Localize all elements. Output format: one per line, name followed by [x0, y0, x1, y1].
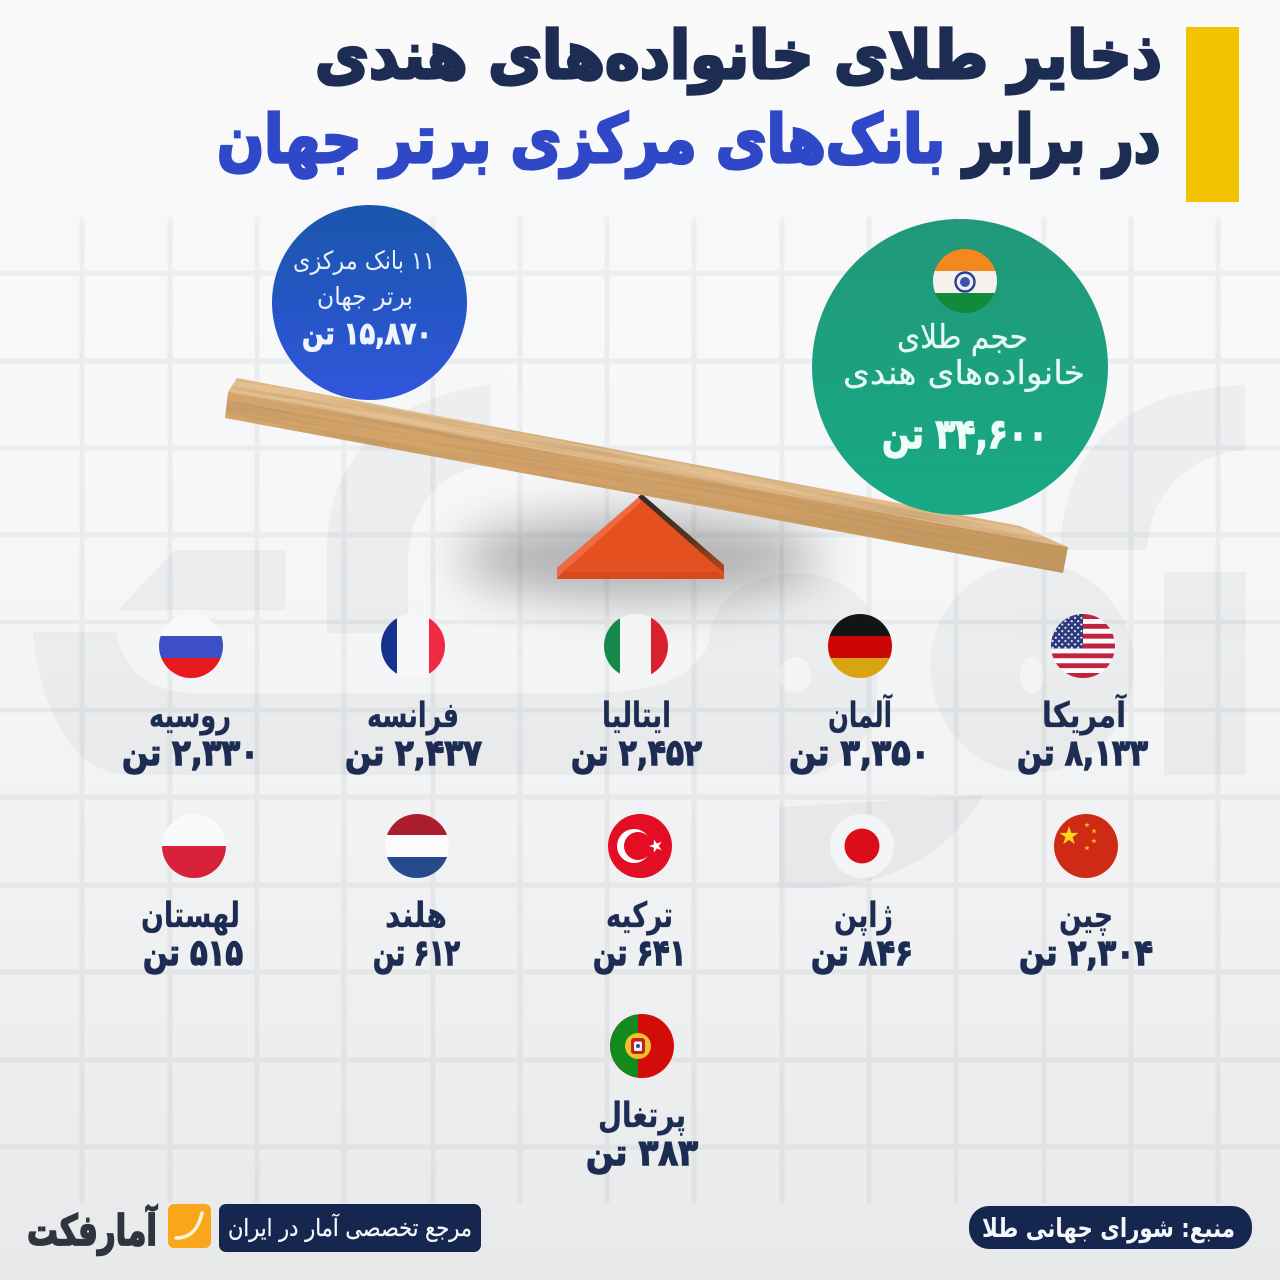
item: France: [345, 614, 482, 774]
icon: Japan flag: [830, 814, 894, 878]
icon: China flag: [1054, 814, 1118, 878]
title line 2 blue: بانک‌های مرکزی برتر جهان: [217, 101, 945, 179]
item: Italy: [571, 614, 702, 774]
fulcrum triangle: [557, 494, 724, 579]
item: Portugal: پرتغال: [598, 1096, 686, 1136]
title block: [217, 17, 1239, 202]
background watermark logo: [33, 385, 1246, 888]
item: China: [1019, 814, 1153, 974]
item: Japan: ۸۴۶ تن: [811, 933, 913, 974]
seesaw plank: [225, 378, 1068, 573]
circle: 11 central banks: ۱۵,۸۷۰ تن: [302, 316, 432, 352]
item: Russia: روسیه: [149, 696, 231, 736]
item: Netherlands: هلند: [385, 896, 447, 936]
footer: tagline chip: مرجع تخصصی آمار در ایران: [228, 1213, 472, 1242]
circle: 11 central banks: برتر جهان: [317, 282, 413, 312]
item: Netherlands: ۶۱۲ تن: [373, 933, 460, 974]
item: Japan: [811, 814, 913, 974]
item: Turkey: ۶۴۱ تن: [593, 933, 686, 974]
item: France: ۲,۴۳۷ تن: [345, 733, 482, 774]
shadow under seesaw: [460, 516, 820, 600]
title line 2 dark: در برابر: [961, 101, 1160, 178]
item: Netherlands: [373, 814, 460, 974]
footer: tagline chip: [219, 1204, 481, 1252]
circle: Indian households gold: حجم طلای: [897, 317, 1028, 356]
title line 1: ذخایر طلای خانواده‌های هندی: [315, 17, 1162, 95]
item: Portugal: ۳۸۳ تن: [586, 1133, 698, 1174]
icon: Poland flag: [162, 822, 226, 878]
item: USA: آمریکا: [1042, 693, 1127, 736]
item: France: فرانسه: [367, 696, 459, 736]
icon: France flag: [381, 614, 445, 678]
item: Germany: [789, 614, 930, 774]
icon: India flag: [933, 249, 997, 313]
item: Poland: لهستان: [141, 896, 240, 936]
circle: Indian households gold: خانواده‌های هندی: [843, 353, 1085, 392]
icon: Portugal flag: [610, 1014, 674, 1078]
item: China: چین: [1059, 896, 1113, 936]
icon: Russia flag: [159, 614, 223, 678]
item: Germany: ۳,۳۵۰ تن: [789, 733, 930, 774]
icon: Italy flag: [604, 614, 668, 678]
logo wordmark: آمارفکت: [27, 1205, 158, 1255]
item: Germany: آلمان: [828, 693, 893, 736]
icon: Netherlands flag: [385, 814, 449, 878]
item: Italy: ایتالیا: [602, 696, 671, 736]
item: USA: [1017, 614, 1148, 774]
footer: source chip: [969, 1206, 1252, 1249]
item: China: ۲,۳۰۴ تن: [1019, 933, 1153, 974]
icon: logo square: [168, 1204, 211, 1248]
circle: 11 central banks: [272, 205, 467, 400]
item: Italy: ۲,۴۵۲ تن: [571, 733, 702, 774]
icon: Germany flag: [828, 614, 892, 678]
item: Russia: ۲,۳۳۰ تن: [122, 733, 259, 774]
icon: Turkey flag: [608, 814, 672, 878]
item: Russia: [122, 614, 259, 774]
item: Turkey: [593, 814, 686, 974]
item: Poland: [141, 814, 243, 974]
item: Poland: ۵۱۵ تن: [143, 933, 243, 974]
item: USA: ۸,۱۳۳ تن: [1017, 733, 1148, 774]
circle: Indian households gold: [812, 219, 1108, 515]
circle: Indian households gold: ۳۴,۶۰۰ تن: [882, 410, 1048, 458]
icon: USA flag: [1051, 614, 1115, 678]
item: Japan: ژاپن: [834, 896, 893, 936]
circle: 11 central banks: ۱۱ بانک مرکزی: [293, 246, 435, 275]
item: Turkey: ترکیه: [606, 896, 673, 936]
accent bar: [1186, 27, 1239, 202]
item: Portugal: [586, 1014, 698, 1174]
